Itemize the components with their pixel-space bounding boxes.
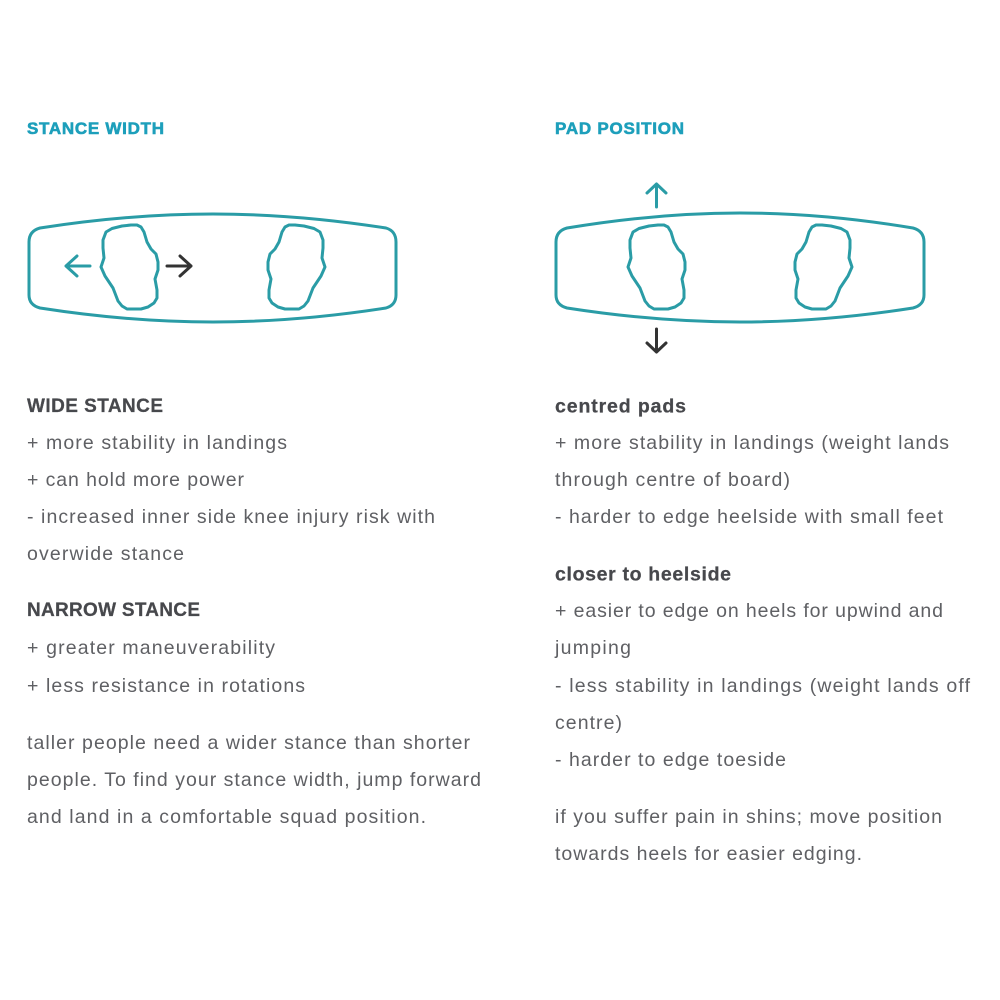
text block: narrow stance xyxy=(27,600,305,697)
text block: wide stance: + can hold more power xyxy=(27,469,244,491)
text block: centred pads: + more stability in landings (weight lands xyxy=(555,432,949,454)
left binding pad xyxy=(628,225,685,309)
text block: closer to heelside: + easier to edge on heels for upwind and xyxy=(555,600,943,622)
text block: wide stance: overwide stance xyxy=(27,543,184,565)
arrow: up xyxy=(647,184,666,207)
text block: stance advice: taller people need a wider stance than shorter xyxy=(27,732,470,754)
left binding pad xyxy=(101,225,158,309)
heading: pad position: PAD POSITION xyxy=(555,119,684,138)
text block: closer to heelside: jumping xyxy=(554,637,631,659)
right binding pad xyxy=(268,225,325,309)
right binding pad xyxy=(795,225,852,309)
diagram: stance width board xyxy=(29,214,396,322)
text block: centred pads: - harder to edge heelside with small feet xyxy=(555,506,944,528)
board outline xyxy=(556,213,924,322)
text block: stance advice: and land in a comfortable squad position. xyxy=(27,806,426,828)
text block: shin pain advice: if you suffer pain in shins; move position xyxy=(555,806,942,828)
text block: closer to heelside: centre) xyxy=(555,712,622,734)
text block: closer to heelside: - harder to edge toeside xyxy=(555,749,786,771)
text block: wide stance xyxy=(27,396,435,565)
text block: shin pain advice: towards heels for easier edging. xyxy=(555,843,862,865)
text block: centred pads: centred pads xyxy=(555,396,686,418)
text block: narrow stance: + less resistance in rotations xyxy=(27,675,305,697)
text block: centred pads xyxy=(555,396,949,528)
text block: centred pads: through centre of board) xyxy=(555,469,790,491)
text block: stance advice xyxy=(27,732,481,828)
text block: closer to heelside: closer to heelside xyxy=(555,564,731,586)
text block: stance advice: people. To find your stance width, jump forward xyxy=(27,769,481,791)
text block: closer to heelside xyxy=(554,564,971,771)
text block: closer to heelside: - less stability in landings (weight lands off xyxy=(555,675,971,697)
text block: narrow stance: NARROW STANCE xyxy=(27,600,200,621)
heading: stance width: STANCE WIDTH xyxy=(27,119,164,138)
arrow: outward left xyxy=(66,256,90,276)
board outline xyxy=(29,214,396,322)
text block: wide stance: - increased inner side knee injury risk with xyxy=(27,506,435,528)
text block: narrow stance: + greater maneuverability xyxy=(27,637,275,659)
arrow: inward right xyxy=(167,256,191,276)
text block: wide stance: WIDE STANCE xyxy=(27,396,163,417)
text block: wide stance: + more stability in landings xyxy=(27,432,287,454)
arrow: down xyxy=(647,329,666,352)
text block: shin pain advice xyxy=(555,806,942,865)
diagram: pad position board xyxy=(556,184,924,352)
